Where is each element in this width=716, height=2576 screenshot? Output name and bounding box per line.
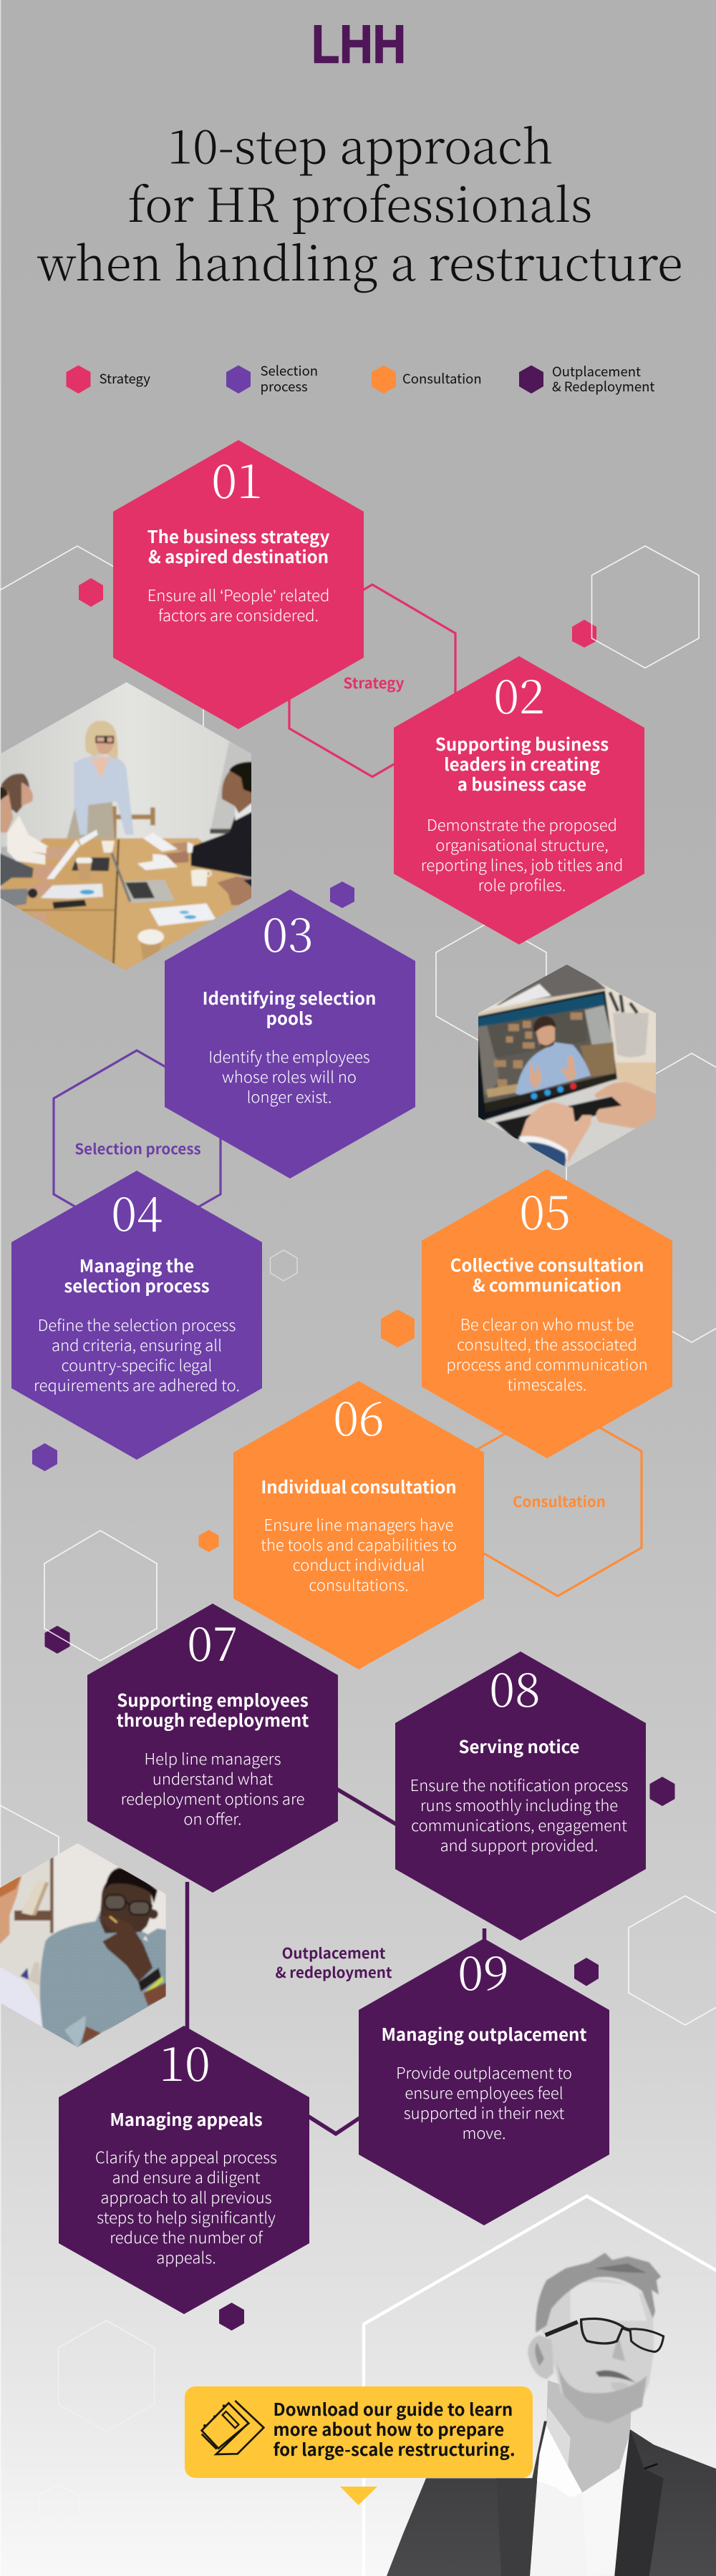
number: 01	[211, 444, 263, 512]
section label: Selection process: Selection process	[74, 1137, 201, 1158]
hexagon	[359, 1938, 609, 2225]
panel: step 08	[395, 1652, 646, 1941]
body: Help line managers	[144, 1747, 281, 1770]
section label: Strategy: Strategy	[344, 671, 405, 693]
heading: Supporting business	[435, 731, 609, 756]
body: and criteria, ensuring all	[52, 1333, 222, 1356]
hexagon	[59, 2026, 309, 2314]
standing woman	[67, 801, 115, 839]
body: Demonstrate the proposed	[427, 813, 617, 836]
body: factors are considered.	[158, 603, 319, 626]
right man	[190, 811, 251, 878]
panel: step 05	[422, 1169, 672, 1458]
number: 09	[458, 1936, 509, 2004]
body: understand what	[153, 1767, 273, 1790]
body: Ensure line managers have	[264, 1513, 453, 1536]
body: appeals.	[156, 2245, 216, 2268]
heading: & aspired destination	[148, 543, 329, 568]
number: 06	[333, 1381, 384, 1449]
panel: step 06	[233, 1381, 484, 1669]
legend item: Strategy	[66, 365, 150, 394]
legend item: Outplacement & Redeployment	[519, 362, 654, 396]
heading: through redeployment	[117, 1707, 309, 1732]
body: ensure employees feel	[405, 2081, 563, 2104]
section label: Consultation: Consultation	[513, 1490, 606, 1511]
papers on table	[143, 832, 178, 852]
big laptop	[124, 879, 175, 903]
number: 03	[262, 897, 314, 965]
legend item: Consultation: Consultation	[402, 369, 482, 388]
title: 10-step approach	[168, 110, 553, 177]
hexagon	[87, 1604, 338, 1893]
heading: & communication	[473, 1272, 621, 1297]
icon: book	[202, 2401, 263, 2454]
body: organisational structure,	[435, 833, 609, 856]
body: redeployment options are	[121, 1787, 304, 1810]
body: and support provided.	[440, 1833, 598, 1856]
body: reporting lines, job titles and	[421, 853, 623, 876]
legend item: Consultation	[372, 365, 482, 394]
heading: Individual consultation	[261, 1473, 457, 1498]
panel: step 04	[11, 1171, 262, 1460]
body: consultations.	[309, 1573, 409, 1596]
legend item: Selection process	[226, 361, 318, 396]
legend item: Outplacement & Redeployment: Outplacement	[552, 362, 641, 381]
legend item: Outplacement & Redeployment: & Redeployment	[552, 377, 654, 396]
neck	[546, 2381, 632, 2492]
body: whose roles will no	[222, 1065, 357, 1088]
body: runs smoothly including the	[420, 1793, 618, 1816]
number: 05	[519, 1175, 571, 1243]
body: requirements are adhered to.	[34, 1373, 240, 1396]
arrow: down triangle	[340, 2487, 377, 2505]
left man	[0, 787, 13, 832]
panel: step 09	[359, 1936, 609, 2225]
panel: step 03	[165, 889, 415, 1179]
body: role profiles.	[478, 873, 566, 896]
body: Ensure all ‘People’ related	[147, 583, 329, 606]
callout text: Download our guide to learn	[274, 2396, 513, 2421]
callout text: for large-scale restructuring.	[274, 2436, 516, 2461]
thin white outline hexagons	[0, 546, 716, 2576]
body: Define the selection process	[38, 1313, 236, 1336]
heading: selection process	[64, 1272, 210, 1297]
suit	[387, 2421, 716, 2576]
hair	[536, 2253, 661, 2333]
connectors: outplacement and redeployment	[188, 1787, 484, 2134]
number: 04	[111, 1176, 163, 1244]
lapels	[614, 2429, 664, 2576]
panel: step 07	[87, 1604, 338, 1893]
number: 07	[187, 1606, 238, 1674]
callout box	[185, 2386, 533, 2478]
title: for HR professionals	[127, 168, 593, 235]
number: 10	[159, 2026, 211, 2094]
body: approach to all previous	[100, 2185, 272, 2208]
glasses	[546, 2318, 664, 2352]
photo: man thinking	[0, 1843, 166, 2047]
hexagon	[11, 1171, 262, 1460]
section label: Outplacement & redeployment: Outplacement	[282, 1941, 386, 1963]
heading: leaders in creating	[444, 751, 600, 776]
body: communications, engagement	[411, 1813, 627, 1836]
body: Identify the employees	[208, 1045, 370, 1068]
photo: man with glasses, greyscale	[387, 2253, 716, 2576]
hexagon	[233, 1381, 484, 1669]
legend item: Strategy: Strategy	[99, 369, 150, 388]
body: country-specific legal	[62, 1353, 212, 1376]
face	[542, 2279, 654, 2424]
chair	[114, 806, 154, 839]
body: consulted, the associated	[457, 1332, 637, 1355]
left woman	[1, 774, 29, 814]
hexagon	[395, 1652, 646, 1941]
right hands	[218, 876, 251, 906]
section outline: Strategy	[289, 585, 455, 777]
body: Ensure the notification process	[410, 1773, 628, 1796]
small laptop	[72, 857, 110, 871]
body: reduce the number of	[110, 2225, 263, 2248]
body: move.	[462, 2121, 506, 2144]
number: 08	[489, 1652, 541, 1720]
hexagon	[422, 1169, 672, 1458]
ear	[528, 2335, 553, 2379]
body: process and communication	[446, 1352, 648, 1375]
body: the tools and capabilities to	[261, 1533, 457, 1556]
phone	[52, 899, 87, 909]
body: Clarify the appeal process	[95, 2145, 277, 2168]
papers held	[47, 839, 80, 879]
heading: Identifying selection	[203, 985, 376, 1010]
heading: Serving notice	[458, 1733, 580, 1758]
heading: Managing appeals	[110, 2106, 263, 2131]
photo: meeting room	[0, 683, 251, 970]
collar right	[582, 2469, 623, 2576]
heading: a business case	[458, 771, 586, 796]
legend	[66, 361, 654, 396]
body: longer exist.	[247, 1085, 332, 1108]
section label: Outplacement & redeployment: & redeployment	[275, 1961, 392, 1982]
section outline: Selection process	[54, 1050, 221, 1242]
hexagon	[165, 889, 415, 1179]
panel: step 01	[113, 440, 364, 729]
heading: pools	[266, 1005, 313, 1030]
hexagon	[113, 440, 364, 729]
body: steps to help significantly	[97, 2205, 276, 2228]
legend item: Selection process: process	[261, 377, 308, 396]
photo: video call on laptop	[478, 965, 656, 1168]
legend item: Selection process: Selection	[261, 361, 318, 380]
shirt	[530, 2424, 631, 2576]
panel: step 10	[59, 2026, 309, 2314]
callout: download guide	[185, 2386, 533, 2478]
cups	[76, 862, 93, 872]
heading: Managing outplacement	[381, 2021, 587, 2046]
section outline: Consultation	[474, 1404, 642, 1596]
heading: Collective consultation	[450, 1252, 644, 1277]
body: timescales.	[508, 1372, 586, 1395]
small decorative hexagons	[32, 578, 674, 2331]
number: 02	[493, 659, 545, 727]
title: when handling a restructure	[37, 227, 683, 294]
logo: LHH: LHH	[311, 14, 406, 74]
body: conduct individual	[293, 1553, 425, 1576]
hexagon	[394, 656, 644, 945]
body: Provide outplacement to	[396, 2061, 572, 2084]
body: supported in their next	[404, 2101, 565, 2124]
beard	[555, 2354, 647, 2424]
body: on offer.	[183, 1807, 242, 1830]
heading: The business strategy	[147, 523, 330, 548]
panel: step 02	[394, 656, 644, 945]
body: Be clear on who must be	[460, 1312, 634, 1335]
heading: Managing the	[79, 1252, 194, 1277]
body: and ensure a diligent	[112, 2165, 261, 2188]
callout text: more about how to prepare	[274, 2416, 504, 2441]
heading: Supporting employees	[117, 1687, 309, 1712]
